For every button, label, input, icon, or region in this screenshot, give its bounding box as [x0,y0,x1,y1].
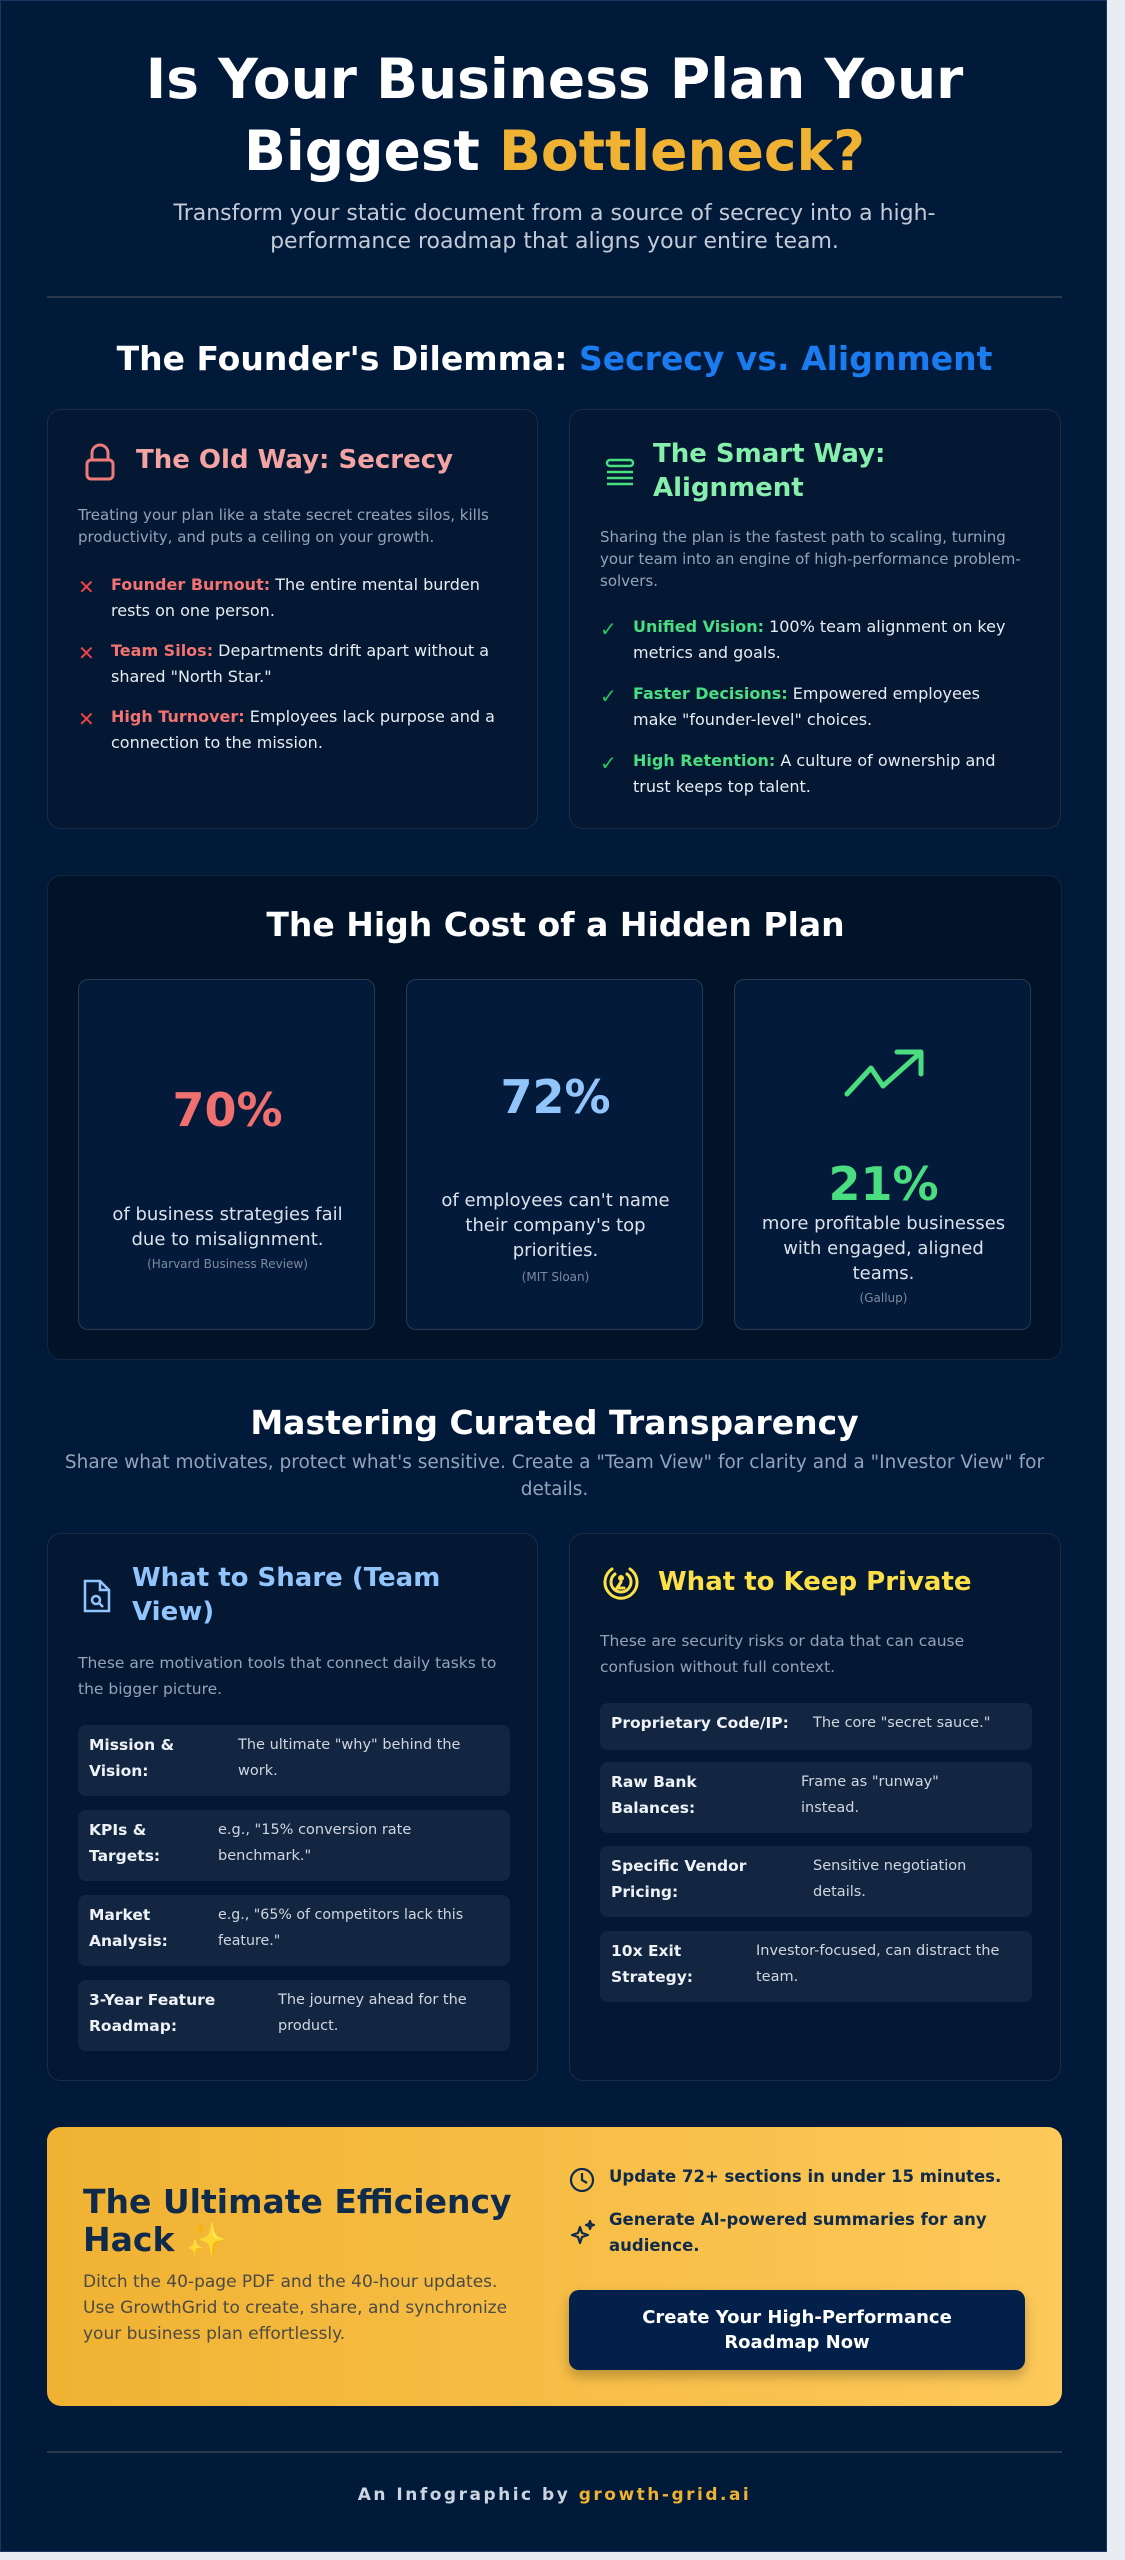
subtitle: Transform your static document from a source of secrecy into a high-performance roadmap that aligns your entire team. [174,201,936,254]
list: private items: The core "secret sauce." [813,1715,990,1731]
list: problems: Founder Burnout: The entire mental burden rests on one person. [111,575,480,620]
stat: 21%: more profitable businesses with engaged, aligned teams. [762,1213,1005,1284]
list: private items: Balances: [611,1799,695,1817]
list: share items: The ultimate "why" behind the work. [238,1737,460,1779]
list: private items: 10x Exit [611,1942,681,1960]
feature: AI summaries: Generate AI-powered summaries for any audience. [609,2210,987,2255]
list: private items: Sensitive negotiation [813,1858,966,1874]
button: Create Your High-Performance [642,2307,952,2328]
panel: old way [47,409,538,829]
stat: 72%: of employees can't name their company's top priorities. [441,1190,670,1261]
list: share items: 3-Year Feature [89,1991,215,2009]
list: share items: Analysis: [89,1932,168,1950]
list: private items: Specific Vendor [611,1857,746,1875]
stat: 21%: (Gallup) [860,1291,907,1305]
list: problems [78,575,495,752]
list: benefits: High Retention: A culture of ownership and trust keeps top talent. [633,751,996,796]
text: These are motivation tools that connect daily tasks to the bigger picture. [78,1654,496,1698]
list: private items: Raw Bank [611,1773,697,1791]
title [146,47,964,183]
list: problems: Team Silos: Departments drift apart without a shared "North Star." [111,641,489,686]
stat: 72%: (MIT Sloan) [522,1270,589,1284]
list: problems: ✕ [78,575,95,599]
button [569,2290,1025,2370]
list: problems: ✕ [78,641,95,665]
icon: stack [606,458,634,486]
heading: Hack ✨ [83,2220,227,2259]
list: private items: Frame as "runway" [801,1774,939,1790]
feature: update: Update 72+ sections in under 15 minutes. [609,2167,1001,2186]
text: Ditch the 40-page PDF and the 40-hour updates. Use GrowthGrid to create, share, and synchronize your business plan effortlessly. [83,2272,507,2344]
list: private items: Proprietary Code/IP: [611,1714,789,1732]
stat: 70%: of business strategies fail due to misalignment. [112,1204,343,1250]
list: share items: Market [89,1906,150,1924]
subheading: Share what motivates, protect what's sensitive. Create a "Team View" for clarity and a "Investor View" for details. [65,1452,1044,1500]
heading: founder's dilemma: The Founder's Dilemma: Secrecy vs. Alignment [117,339,992,378]
button: Roadmap Now [724,2332,870,2353]
stat: 21% [734,979,1031,1330]
icon: private [604,1567,638,1600]
heading: curated transparency: Mastering Curated Transparency [250,1403,859,1442]
heading [83,2182,512,2259]
heading: The Smart Way: [653,439,885,469]
heading: What to Share (Team [132,1563,440,1593]
list: problems: ✕ [78,707,95,731]
footer: An Infographic by growth-grid.ai [358,2485,751,2505]
panel: smart way [569,409,1061,829]
panel: efficiency CTA [47,2127,1062,2406]
list: private items: Strategy: [611,1968,693,1986]
list: share items: Mission & [89,1736,174,1754]
list: share items: e.g., "15% conversion rate benchmark." [218,1822,411,1864]
heading: Alignment [653,473,804,503]
heading: The Old Way: Secrecy [136,445,453,475]
stat: 70%: (Harvard Business Review) [147,1257,308,1271]
list: benefits: ✓ [600,617,617,641]
list: private items: details. [813,1884,866,1900]
title: Is Your Business Plan Your [146,47,963,111]
feature: update [570,2167,1001,2192]
stat: 72%: 72% [500,1070,611,1124]
list: private items: Pricing: [611,1883,678,1901]
heading: What to Keep Private [658,1567,972,1597]
list: benefits: Unified Vision: 100% team alignment on key metrics and goals. [633,617,1005,662]
list: share items: Vision: [89,1762,148,1780]
list: benefits: ✓ [600,684,617,708]
stat: 21%: 21% [828,1157,939,1211]
stat: 72% [406,979,703,1330]
panel: keep private [569,1533,1061,2081]
list: private items: instead. [801,1800,859,1816]
list: problems: High Turnover: Employees lack purpose and a connection to the mission. [111,707,495,752]
stat: 70% [78,979,375,1330]
list: private items: Investor-focused, can distract the team. [756,1943,999,1985]
heading [653,439,885,503]
heading [132,1563,440,1627]
list: share items [78,1725,510,2051]
panel: what to share [47,1533,538,2081]
list: share items: Roadmap: [89,2017,177,2035]
heading: The Ultimate Efficiency [83,2182,512,2221]
heading: View) [132,1597,214,1627]
list: benefits: ✓ [600,751,617,775]
text: Sharing the plan is the fastest path to scaling, turning your team into an engine of high-performance problem-solvers. [600,528,1021,590]
list: share items: KPIs & [89,1821,146,1839]
heading: The High Cost of a Hidden Plan [266,905,845,944]
icon: trend arrow [844,1050,924,1096]
stat: 70%: 70% [172,1083,283,1137]
title: Biggest Bottleneck? [244,119,865,183]
icon: document search [84,1580,110,1612]
list: private items [600,1703,1032,2002]
icon: lock [86,444,114,480]
panel: high cost stats [47,875,1062,1360]
list: benefits: Faster Decisions: Empowered employees make "founder-level" choices. [633,684,980,729]
list: share items: Targets: [89,1847,160,1865]
list: benefits [600,617,1005,796]
list: share items: The journey ahead for the product. [278,1992,467,2034]
list: share items: e.g., "65% of competitors lack this feature." [218,1907,463,1949]
text: Treating your plan like a state secret creates silos, kills productivity, and puts a ceiling on your growth. [78,506,489,546]
text: These are security risks or data that can cause confusion without full context. [600,1632,964,1676]
